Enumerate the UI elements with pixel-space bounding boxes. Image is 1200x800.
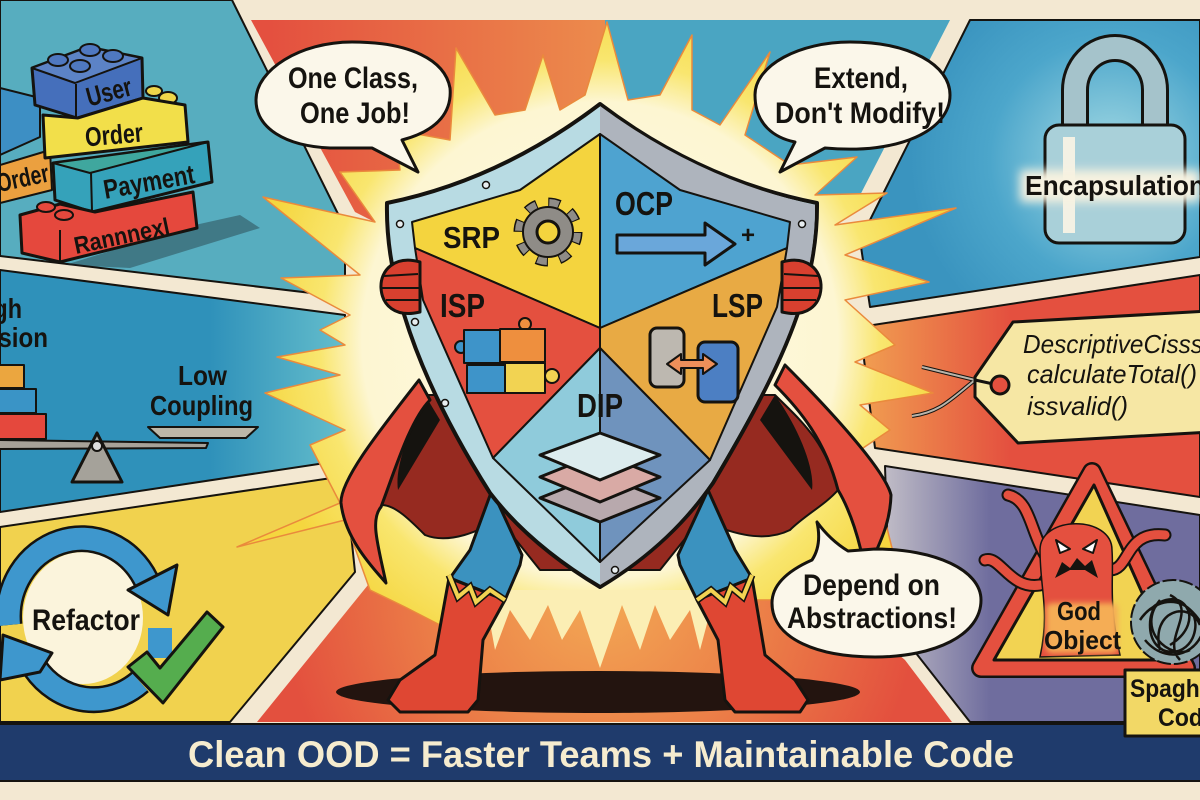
icon: right hand [782,260,821,313]
panel: center top right [605,20,950,340]
panel: bricks background [0,0,345,297]
icon: cape left outer [341,380,430,583]
icon: spaghetti ball [1131,580,1200,664]
icon: price tag [912,311,1200,443]
icon: seesaw [0,365,258,482]
icon: left boot [388,578,505,712]
text: dont modify: Don't Modify! [775,97,945,130]
icon: arrow plus: + [741,222,755,249]
panel: encapsulation background [860,20,1200,307]
icon: legs [450,490,752,600]
panel: naming tag background [860,275,1200,497]
panel: LSP [600,248,787,460]
panel: DIP [493,348,710,562]
icon: right boot [697,578,808,712]
text: order yellow: Order [84,117,145,152]
panel: OCP [600,134,790,328]
icon: padlock [1020,48,1200,243]
icon: arrow plus [617,222,755,265]
panel: cohesion coupling background [0,270,345,512]
panel: refactor background [0,476,355,722]
icon: cape right outer [775,365,891,575]
banner [0,724,1200,781]
panel: ISP [415,248,600,458]
icon: shield [387,104,817,587]
panel: center bottom [257,400,952,722]
text: code names line 2: calculateTotal() [1027,359,1197,389]
text: OCP: OCP [615,185,673,222]
text: depend on: Depend on [803,569,940,602]
text: payment: Payment [101,159,197,205]
panel: center top left [251,20,606,340]
icon: rivets [396,182,806,574]
text: one job: One Job! [300,97,410,130]
icon: ground shadow [336,671,860,713]
icon: warning triangle [981,472,1186,668]
text: extend: Extend, [814,62,908,95]
text: spaghetti code box [1125,670,1200,736]
icon: refactor arrows [0,539,223,703]
text: SRP: SRP [443,220,500,255]
callout: depend [772,522,981,657]
text: god: God [1057,596,1101,626]
icon: shadow [65,215,260,268]
icon: glow under shield [484,590,716,668]
text: coupling: Coupling [150,390,253,421]
icon: god object monster [985,495,1165,657]
banner: Clean OOD = Faster Teams + Maintainable Code [188,734,1014,775]
panel: SRP [412,134,600,328]
icon: check mark [128,612,223,703]
text: ISP: ISP [440,287,485,324]
text: user: User [83,71,135,112]
icon: brick stack [0,44,260,268]
icon: puzzle [455,318,559,393]
callout: extend [755,42,950,172]
text: abstractions: Abstractions! [787,602,957,635]
text: low: Low [178,360,227,391]
text: object: Object [1044,625,1121,655]
text: LSP: LSP [712,287,763,324]
text: rannnexl: Rannnexl [72,213,172,260]
panel: anti-patterns background [885,466,1200,722]
icon: superhero [336,365,891,713]
icon: starburst [237,22,956,668]
text: code names line 3: issvalid() [1027,391,1128,421]
callout: one class [256,42,450,172]
icon: left hand [381,260,420,313]
icon: cape dark lining [382,395,838,570]
text: DIP: DIP [577,387,623,424]
icon: boot trims [449,575,752,602]
icon: swap blocks [650,328,738,402]
icon: gear [520,204,576,260]
text: refactor: Refactor [32,604,140,637]
text: one class: One Class, [288,62,418,95]
icon: layers [540,433,660,522]
